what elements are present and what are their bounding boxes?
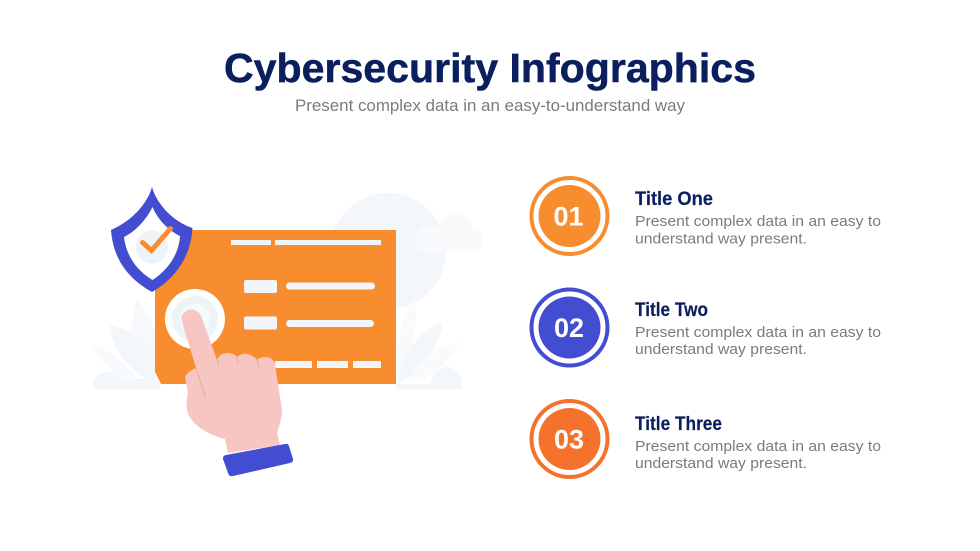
item two text xyxy=(635,300,881,358)
title: Cybersecurity Infographics xyxy=(224,45,756,91)
item one text: Present complex data in an easy to xyxy=(635,213,881,230)
subtitle: Present complex data in an easy-to-understand way xyxy=(295,97,686,115)
illustration: security card with hand xyxy=(92,187,483,476)
item one xyxy=(532,178,881,254)
item one text: understand way present. xyxy=(635,230,807,248)
item three text: Title Three xyxy=(635,414,722,435)
item one text: Title One xyxy=(635,189,713,210)
orange card xyxy=(155,230,396,384)
item two text: Title Two xyxy=(635,300,708,321)
sleeve cuff xyxy=(223,444,293,476)
background circle xyxy=(330,193,446,309)
badge 02 xyxy=(532,290,608,366)
badge 03 xyxy=(532,401,608,477)
item one text xyxy=(635,189,881,248)
badge 01: 01 xyxy=(553,202,584,232)
item three text xyxy=(635,414,881,472)
item three xyxy=(532,401,881,477)
card footer bars xyxy=(275,361,381,368)
item two xyxy=(532,290,881,366)
background plants and ground xyxy=(92,297,462,389)
item two text: Present complex data in an easy to xyxy=(635,324,881,341)
card row one xyxy=(244,280,375,293)
shield icon xyxy=(111,187,192,292)
touch button xyxy=(165,289,225,349)
background cloud xyxy=(416,212,483,252)
badge 02: 02 xyxy=(554,313,584,343)
card row two xyxy=(244,316,374,330)
pointing hand xyxy=(181,310,282,453)
item three text: understand way present. xyxy=(635,455,807,472)
card header bars xyxy=(231,240,381,245)
badge 01 xyxy=(532,178,608,254)
item two text: understand way present. xyxy=(635,341,807,358)
badge 03: 03 xyxy=(554,424,584,454)
item three text: Present complex data in an easy to xyxy=(635,438,881,455)
